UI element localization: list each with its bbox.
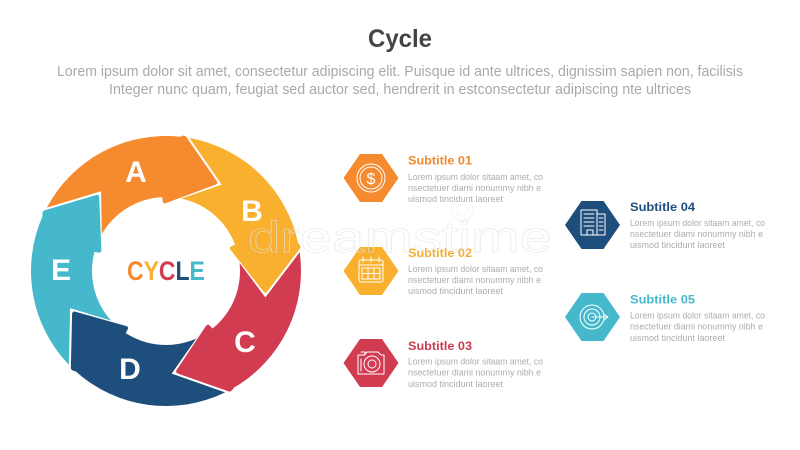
body text 04: uismod tincidunt laoreet [630,240,725,251]
body text 03: nsectetuer diami nonummy nibh e [408,368,541,378]
body text 02: Lorem ipsum dolor sitaam amet, co [408,264,543,275]
item 03 [344,339,543,390]
letter A: A [125,156,147,189]
letter B: B [241,195,263,228]
intro text [57,64,743,98]
body text 02 [408,264,543,297]
body text 02: nsectetuer diami nonummy nibh e [408,275,541,286]
body text 04: nsectetuer diami nonummy nibh e [630,229,763,240]
letter D: D [119,353,141,386]
segment D arrow [45,271,241,450]
intro text: Lorem ipsum dolor sit amet, consectetur adipiscing elit. Puisque id ante ultrices, dignissim sapien non, facilisis [57,64,743,80]
body text 01: Lorem ipsum dolor sitaam amet, co [408,172,543,183]
subtitle 05: Subtitle 05 [630,292,695,306]
hexagon icon: camera [344,339,398,387]
body text 05: nsectetuer diami nonummy nibh e [630,322,763,332]
subtitle 03: Subtitle 03 [408,339,472,353]
body text 02: uismod tincidunt laoreet [408,286,503,297]
body text 05 [630,310,765,344]
segment B arrow [164,116,311,308]
hexagon icon: dollar coin [344,154,398,202]
subtitle 02: Subtitle 02 [408,246,472,260]
segment C arrow [146,231,342,411]
body text 05: uismod tincidunt laoreet [630,333,725,344]
body text 01 [408,172,543,205]
item 04 [565,200,765,251]
watermark: dreamstime [248,213,552,262]
hexagon icon: calendar [344,247,398,295]
letter E: E [51,254,71,287]
body text 05: Lorem ipsum dolor sitaam amet, co [630,310,765,322]
segment A arrow [47,136,217,234]
item 05 [565,292,765,344]
item 02 [344,246,543,297]
title: Cycle [368,25,432,53]
subtitle 04: Subtitle 04 [630,200,695,214]
subtitle 01: Subtitle 01 [408,154,472,168]
body text 04: Lorem ipsum dolor sitaam amet, co [630,218,765,229]
center label: CYCLE [127,256,205,286]
body text 04 [630,218,765,251]
hexagon icon: office building [565,201,620,249]
body text 01: nsectetuer diami nonummy nibh e [408,183,541,194]
hexagon icon: dollar coin: $ [367,171,376,188]
body text 03: uismod tincidunt laoreet [408,379,503,390]
body text 01: uismod tincidunt laoreet [408,194,503,205]
intro text: Integer nunc quam, feugiat sed auctor sed, hendrerit in estconsectetur adipiscing nte ultrices [109,82,691,98]
cycle diagram [0,116,342,450]
body text 03 [408,356,543,390]
watermark [248,199,552,262]
letter C: C [234,326,256,359]
hexagon icon: target [565,293,620,341]
segment E arrow [0,180,147,373]
body text 03: Lorem ipsum dolor sitaam amet, co [408,356,543,368]
item 01 [344,154,543,205]
